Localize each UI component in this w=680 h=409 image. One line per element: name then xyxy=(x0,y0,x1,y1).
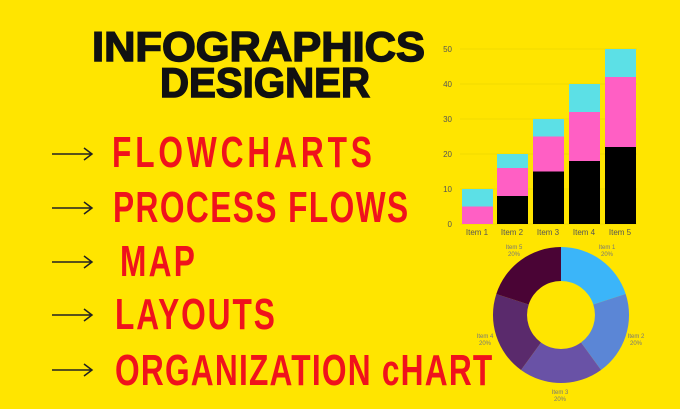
bar chart: Item 3 xyxy=(537,228,560,237)
bar chart: Item 5 xyxy=(609,228,632,237)
bar chart: Item 1 xyxy=(466,228,489,237)
donut chart: Item 3 xyxy=(552,390,569,396)
item: map: MAP xyxy=(120,237,195,286)
bars xyxy=(462,189,493,206)
title xyxy=(92,23,425,106)
donut chart: 20% xyxy=(601,252,614,258)
bar chart: 0 xyxy=(448,220,453,229)
item: layouts: LAYOUTS xyxy=(115,290,275,339)
bar chart: Item 4 xyxy=(573,228,596,237)
donut chart xyxy=(477,245,645,403)
donut chart: Item 1 xyxy=(599,245,616,251)
item: flowcharts: FLOWCHARTS xyxy=(112,128,372,177)
item: map xyxy=(52,237,195,286)
bar chart: 20 xyxy=(443,150,453,159)
donut chart: 20% xyxy=(479,341,492,347)
bar chart: 30 xyxy=(443,115,453,124)
bar chart: 10 xyxy=(443,185,453,194)
bar chart: Item 2 xyxy=(501,228,524,237)
item: organization chart: ORGANIZATION cHART xyxy=(115,346,492,395)
bar chart xyxy=(443,45,637,237)
donut chart: 20% xyxy=(630,341,643,347)
donut chart: Item 4 xyxy=(477,334,494,340)
donut chart: 20% xyxy=(554,397,567,403)
bar chart: 50 xyxy=(443,45,453,54)
service list xyxy=(52,128,492,395)
donut chart: Item 5 xyxy=(506,245,523,251)
title: DESIGNER xyxy=(160,59,370,106)
title: INFOGRAPHICS xyxy=(92,23,425,70)
donut chart: Item 2 xyxy=(628,334,645,340)
donut chart: 20% xyxy=(508,252,521,258)
item: process flows: PROCESS FLOWS xyxy=(113,183,408,232)
bar chart: 40 xyxy=(443,80,453,89)
